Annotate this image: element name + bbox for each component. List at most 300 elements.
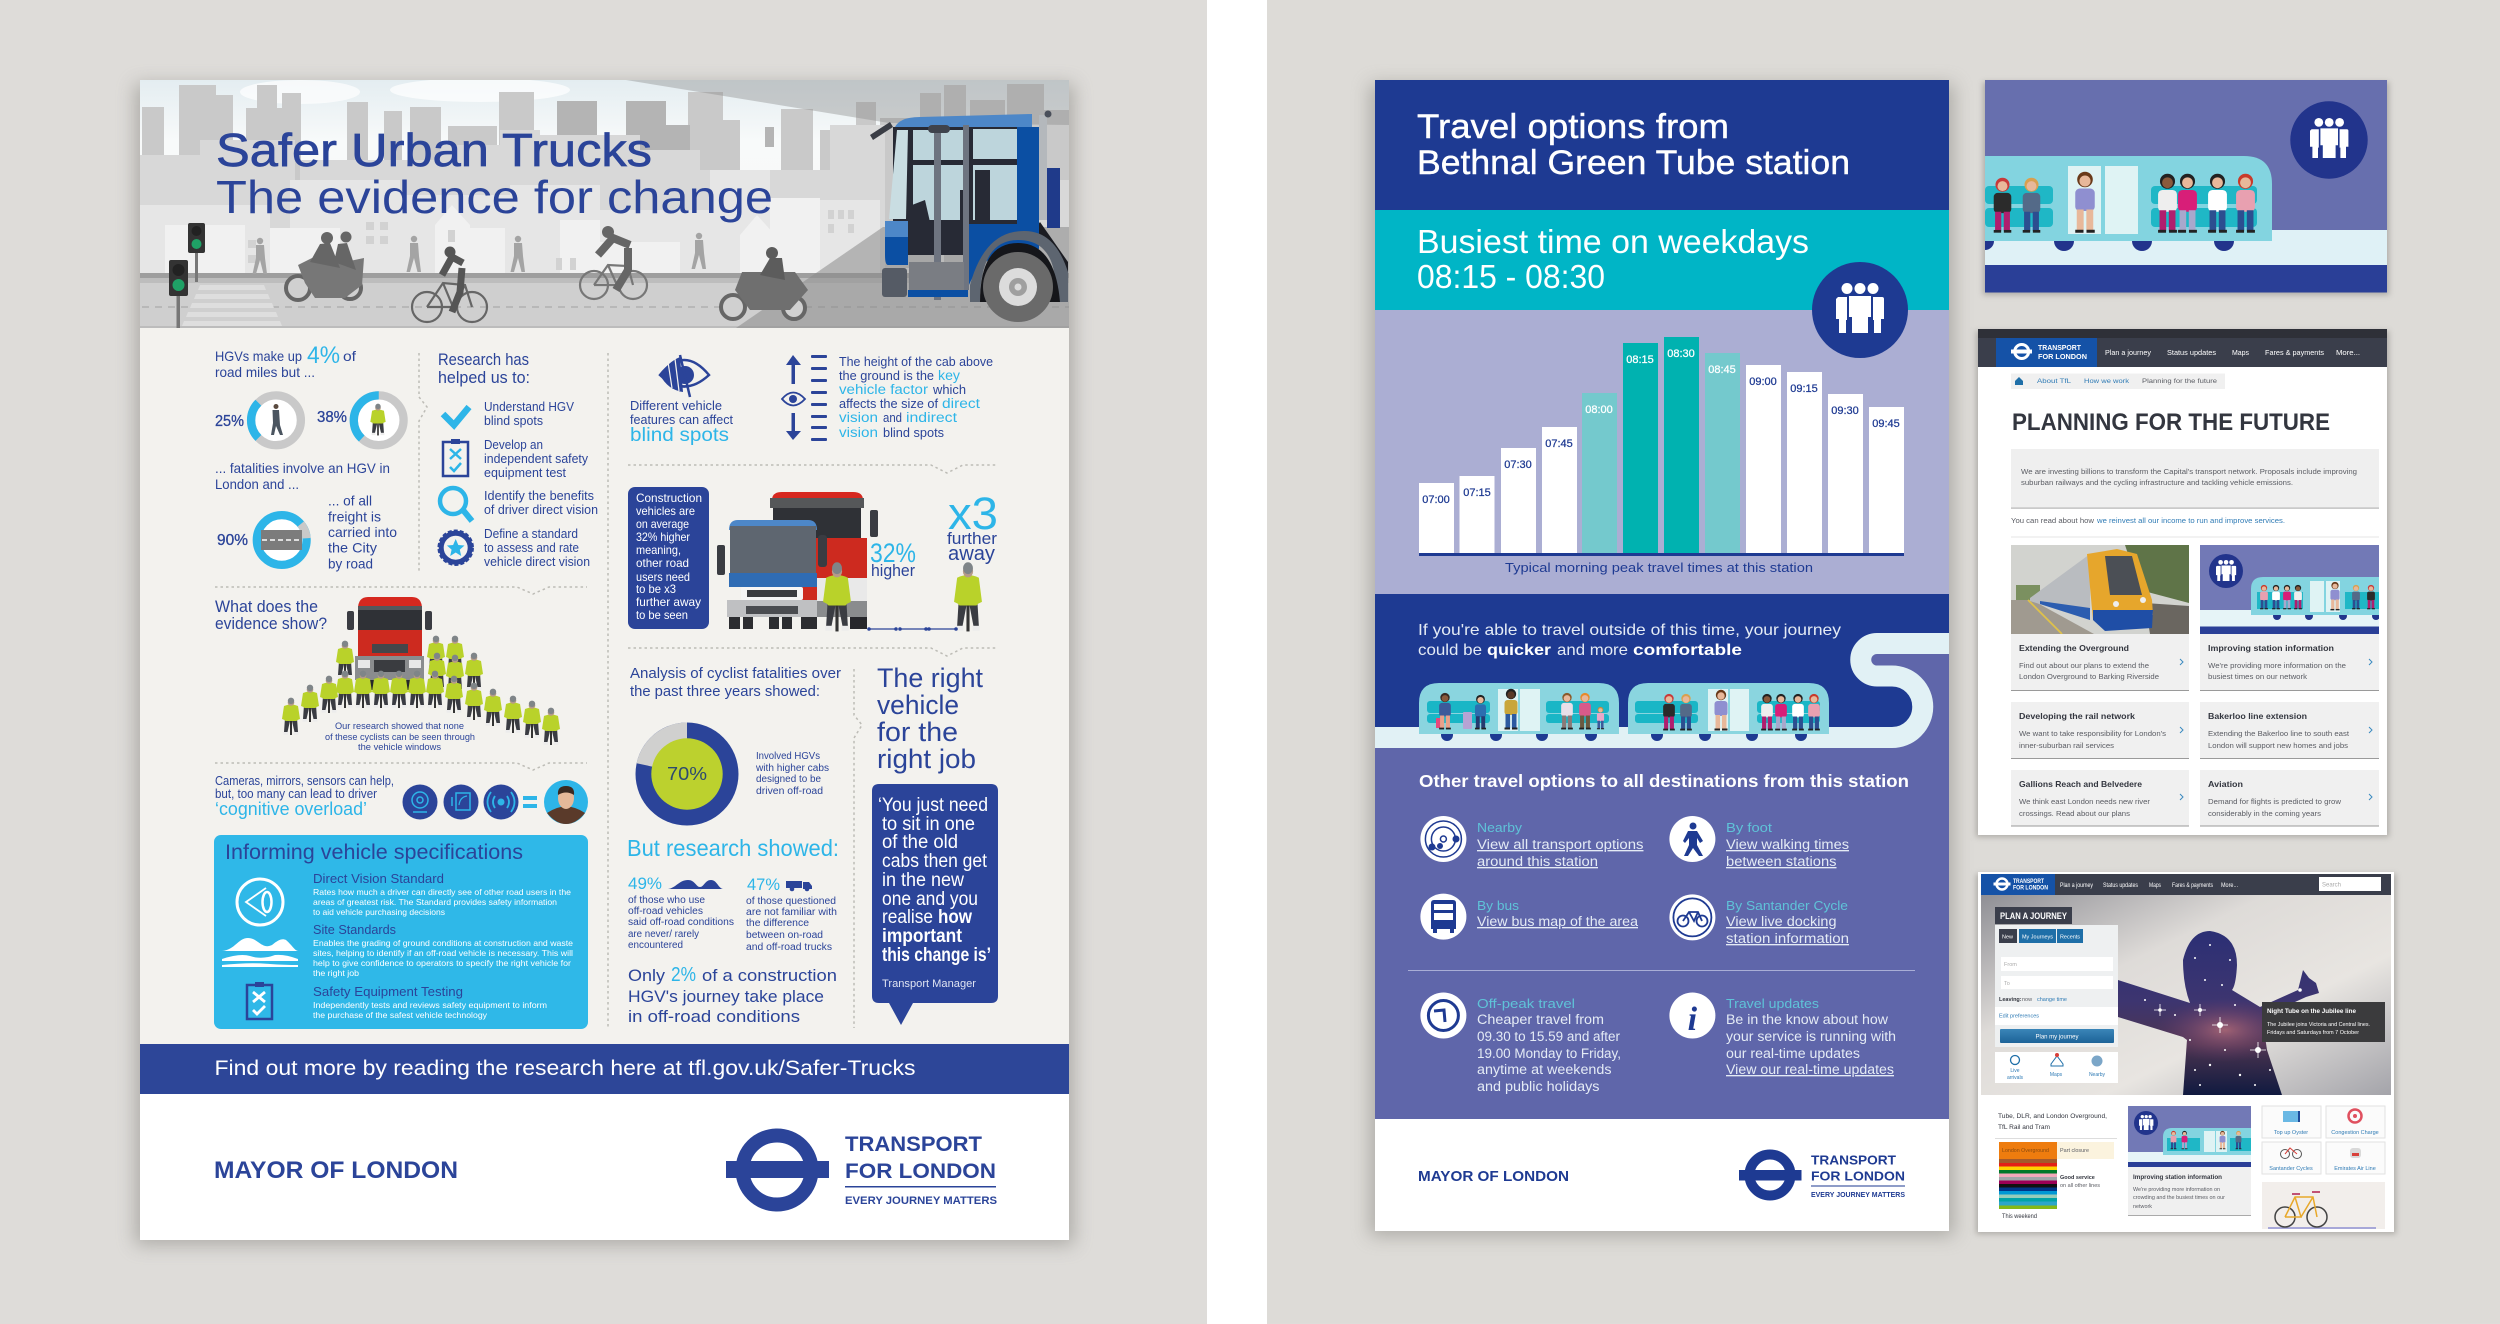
train carriage one	[1419, 683, 1619, 741]
navigation bar: FOR LONDON	[2013, 886, 2048, 892]
stat block: HGV road miles: of	[343, 348, 356, 364]
bar labels: 07:45	[1545, 438, 1573, 450]
cyclist two	[580, 226, 647, 299]
option: santander cycle: station information	[1726, 931, 1849, 946]
option: off-peak travel: and public holidays	[1477, 1079, 1600, 1094]
title band: Travel options from	[1417, 108, 1729, 146]
navigation bar: Maps	[2149, 883, 2161, 889]
cyclist fatalities analysis: Involved HGVs	[756, 751, 820, 762]
off-peak message: and more	[1557, 642, 1628, 659]
research list: blind spots	[484, 414, 543, 428]
cyclist one	[412, 246, 487, 322]
option: nearby: View all transport options	[1477, 837, 1644, 852]
option: santander cycle: By Santander Cycle	[1726, 898, 1848, 913]
bar labels: 09:45	[1872, 418, 1900, 430]
night tube caption: Night Tube on the Jubilee line	[2267, 1008, 2356, 1015]
stat block: HGV road miles: by road	[328, 556, 373, 572]
navigation bar: TRANSPORT	[2038, 343, 2081, 352]
panel: informing vehicle specifications: Safety Equipment Testing	[313, 984, 463, 999]
link cards: London Overground to Barking Riverside	[2019, 674, 2159, 681]
option: off-peak travel	[1420, 992, 1621, 1094]
panel: informing vehicle specifications: Rates how much a driver can directly see of other road users in the	[313, 887, 571, 897]
link cards: Gallions Reach and Belvedere	[2019, 779, 2142, 789]
cyclist fatalities analysis: But research showed:	[627, 835, 839, 861]
mayor of london wordmark: MAYOR OF LONDON	[214, 1157, 458, 1184]
website screenshot: planning for the future	[1978, 329, 2387, 835]
off-peak message: quicker	[1487, 642, 1551, 659]
label: x3 further away	[947, 488, 998, 565]
journey planner panel: Leaving:	[1999, 997, 2022, 1003]
option: off-peak travel: Off-peak travel	[1477, 996, 1575, 1011]
busiest time band: Busiest time on weekdays	[1417, 223, 1809, 260]
night tube caption	[2262, 1002, 2385, 1042]
donut 25 percent	[215, 385, 311, 456]
icon: direct vision	[237, 879, 283, 925]
stat block: HGV road miles: ... of all	[328, 493, 372, 509]
link cards: inner-suburban rail services	[2019, 743, 2115, 750]
navigation bar: Plan a journey	[2105, 348, 2151, 357]
off-peak message	[1418, 622, 1841, 659]
transport for london wordmark: FOR LONDON	[845, 1160, 996, 1183]
cyclist fatalities analysis: designed to be	[756, 774, 821, 785]
section divider	[1408, 970, 1915, 971]
link cards: Aviation	[2208, 779, 2243, 789]
cyclist fatalities analysis: the past three years showed:	[630, 684, 820, 700]
navigation bar: More...	[2336, 348, 2360, 357]
icon: clipboard	[443, 439, 468, 476]
purple section background	[1375, 594, 1949, 1119]
label: 32 percent higher	[870, 538, 916, 580]
busiest time band: 08:15 - 08:30	[1417, 258, 1605, 295]
option: off-peak travel: 09.30 to 15.59 and after	[1477, 1029, 1620, 1044]
right vehicle heading: The right	[877, 663, 983, 693]
callout: construction vehicles: vehicles are	[636, 504, 695, 518]
cab height block: vision	[839, 425, 878, 440]
transport for london wordmark	[1811, 1152, 1905, 1199]
galaxy silhouette	[2110, 925, 2325, 1095]
website screenshot: TfL homepage	[1978, 872, 2394, 1232]
evidence section	[215, 597, 560, 753]
research list: of driver direct vision	[484, 503, 598, 517]
panel: informing vehicle specifications: to aid vehicle purchasing decisions	[313, 907, 445, 917]
blue section above track	[1375, 594, 1949, 738]
transport for london wordmark: EVERY JOURNEY MATTERS	[845, 1195, 997, 1207]
icon: mirror	[444, 784, 478, 820]
roundel logo	[726, 1136, 829, 1204]
navigation bar: Search	[2322, 882, 2341, 888]
icon: height scale and eye	[782, 355, 827, 441]
callout: construction vehicles: 32% higher	[636, 530, 690, 544]
page heading: PLANNING FOR THE FUTURE	[2012, 409, 2330, 436]
icon: magnifier	[440, 488, 472, 521]
link cards: Extending the Bakerloo line to south east	[2208, 731, 2349, 738]
cyclist fatalities analysis: driven off-road	[756, 786, 823, 797]
banner card: station information	[1976, 80, 2387, 292]
title band	[1375, 80, 1949, 210]
cab height block: affects the size of	[839, 397, 939, 411]
cab height block: and	[883, 411, 902, 425]
title	[216, 124, 773, 223]
research list: Define a standard	[484, 527, 578, 541]
research list: vehicle direct vision	[484, 555, 590, 569]
panel: informing vehicle specifications: help to give confidence to operators to specify the right vehicle for	[313, 958, 571, 968]
link cards: Demand for flights is predicted to grow	[2208, 799, 2342, 806]
cyclist fatalities analysis: with higher cabs	[755, 763, 829, 774]
research list: equipment test	[484, 466, 567, 480]
breadcrumb	[2011, 374, 2225, 389]
poster: Bethnal Green travel options	[1375, 80, 1949, 1231]
bar labels	[1422, 348, 1900, 506]
tube status list: This weekend	[2002, 1214, 2037, 1220]
callout: quote: Transport Manager	[882, 978, 976, 990]
cab height block: vision	[839, 410, 878, 425]
label: x3 further away: x3	[948, 488, 998, 539]
blind spots block: blind spots	[630, 425, 729, 446]
station information card	[2128, 1106, 2251, 1216]
truck view shading	[626, 80, 1069, 328]
callout: construction vehicles	[628, 487, 709, 629]
option: off-peak travel: Cheaper travel from	[1477, 1012, 1604, 1027]
cab height block: The height of the cab above	[839, 355, 993, 369]
breadcrumb: Planning for the future	[2142, 378, 2217, 385]
journey planner panel: PLAN A JOURNEY	[2000, 911, 2067, 921]
header illustration: city street	[140, 78, 1069, 328]
pedestrians silhouettes	[252, 233, 706, 274]
callout: construction vehicles: on average	[636, 517, 689, 531]
panel: informing vehicle specifications	[214, 835, 588, 1029]
option: by bus: By bus	[1477, 898, 1520, 913]
tube status list: Part closure	[2060, 1148, 2089, 1154]
link cards: Improving station information	[2208, 643, 2334, 653]
footer right poster	[1375, 1119, 1949, 1231]
stat: 49 percent: said off-road conditions	[628, 917, 734, 928]
stat: 47 percent: and off-road trucks	[746, 942, 832, 953]
panel: informing vehicle specifications: Direct Vision Standard	[313, 871, 444, 886]
option: by foot: between stations	[1726, 854, 1837, 869]
option: travel updates: Travel updates	[1726, 996, 1820, 1011]
panel: informing vehicle specifications: areas of greatest risk. The Standard provides safety information	[313, 897, 557, 907]
mayor of london wordmark: MAYOR OF LONDON	[1418, 1168, 1569, 1185]
navigation bar: Status updates	[2103, 883, 2138, 889]
stat: 49 percent: off-road vehicles	[628, 906, 703, 917]
footer left poster	[140, 1094, 1069, 1240]
caption: Our research showed that none	[335, 721, 464, 732]
journey planner panel: arrivals	[2007, 1075, 2024, 1081]
transport for london wordmark: TRANSPORT	[1811, 1152, 1896, 1168]
intro box: we reinvest all our income to run and improve services.	[2096, 518, 2285, 525]
quick link tiles: Top up Oyster	[2274, 1130, 2308, 1136]
label: 32 percent higher: higher	[871, 561, 915, 580]
evidence section: What does the	[215, 598, 318, 616]
photo: overground train	[2011, 545, 2189, 634]
option: by foot: By foot	[1726, 820, 1772, 835]
off-peak message: could be	[1418, 642, 1482, 659]
stat: 47 percent: of those questioned	[746, 896, 836, 907]
navigation bar: TRANSPORT	[2013, 879, 2044, 885]
icon: sensor	[484, 784, 518, 820]
background left	[0, 0, 1207, 1324]
caption: the vehicle windows	[358, 742, 441, 753]
dotted dividers	[215, 353, 998, 1028]
journey planner panel	[1995, 907, 2118, 1083]
crowd icon badge	[2290, 101, 2368, 179]
stat: 2 percent: Only	[628, 967, 666, 985]
icon: clipboard white	[247, 982, 272, 1019]
link cards: considerably in the coming years	[2208, 811, 2322, 818]
option: travel updates: your service is running with	[1726, 1029, 1896, 1044]
cab height block: blind spots	[883, 426, 944, 440]
option: travel updates	[1669, 992, 1896, 1077]
callout: quote: to sit in one	[882, 814, 975, 835]
journey planner panel: Nearby	[2089, 1072, 2106, 1078]
callout: construction vehicles: Construction	[636, 491, 702, 505]
navigation bar: Fares & payments	[2172, 883, 2213, 889]
bar chart panel	[1375, 310, 1949, 594]
bar labels: 08:00	[1585, 404, 1613, 416]
donut chart 70 percent: 70%	[667, 764, 707, 784]
stat: 2 percent: HGV's journey take place	[628, 988, 824, 1006]
navigation bar	[1978, 329, 2387, 367]
navigation bar	[1981, 874, 2391, 895]
link cards: Extending the Overground	[2019, 643, 2129, 653]
tube status list: Good service	[2060, 1175, 2095, 1181]
callout: quote: cabs then get	[882, 851, 988, 872]
option: off-peak travel: 19.00 Monday to Friday,	[1477, 1046, 1621, 1061]
station information card: Improving station information	[2133, 1174, 2222, 1181]
callout: construction vehicles: meaning,	[636, 543, 681, 557]
stat: 49 percent: 49%	[628, 874, 662, 893]
blind spots block	[630, 355, 734, 446]
callout: construction vehicles: to be seen	[636, 608, 688, 622]
stat block: HGV road miles: the City	[328, 540, 377, 556]
bars	[1419, 337, 1904, 556]
title band: Bethnal Green Tube station	[1417, 144, 1850, 182]
research list: Develop an	[484, 438, 543, 452]
cyclist near truck	[823, 562, 851, 631]
stat block: HGV road miles: HGVs make up	[215, 348, 302, 364]
evidence section: evidence show?	[215, 615, 327, 633]
icon: driver face	[544, 780, 588, 824]
quick link tiles: Congestion Charge	[2331, 1130, 2379, 1136]
panel: informing vehicle specifications: sites, helping to identify if an off-road vehicle is necessary. This will	[313, 948, 573, 958]
label: x3 further away: away	[948, 543, 995, 565]
chart caption: Typical morning peak travel times at this station	[1505, 560, 1813, 575]
link cards: We want to take responsibility for London's	[2019, 731, 2167, 738]
transport for london wordmark	[845, 1133, 997, 1207]
option: travel updates: View our real-time updates	[1726, 1062, 1894, 1077]
link cards: We're providing more information on the	[2208, 663, 2346, 670]
zebra crossing	[182, 285, 282, 326]
journey planner panel: Edit preferences	[1999, 1014, 2039, 1020]
stat block: HGV road miles: road miles but ...	[215, 364, 315, 380]
right vehicle heading: right job	[877, 744, 976, 774]
busiest time band	[1375, 210, 1949, 310]
stat block: HGV road miles: carried into	[328, 524, 397, 540]
panel: informing vehicle specifications: Informing vehicle specifications	[225, 841, 523, 864]
journey planner panel: From	[2004, 962, 2017, 968]
link cards: Developing the rail network	[2019, 711, 2135, 721]
stat: 47 percent: between on-road	[746, 930, 823, 941]
icon: site ground waves	[222, 938, 298, 967]
research list: Identify the benefits	[484, 489, 594, 503]
stat: 47 percent: the difference	[746, 918, 809, 929]
option: santander cycle	[1669, 894, 1849, 946]
journey planner panel: My Journeys	[2022, 934, 2053, 940]
cab height block: indirect	[906, 410, 957, 425]
poster: Safer Urban Trucks	[140, 78, 1069, 1240]
right vehicle heading: for the	[877, 717, 958, 747]
icon: camera	[402, 784, 438, 820]
transport for london wordmark: EVERY JOURNEY MATTERS	[1811, 1192, 1905, 1199]
red truck front	[347, 597, 432, 690]
stat: 47 percent: 47%	[747, 875, 780, 894]
bar labels: 09:15	[1790, 383, 1818, 395]
night tube caption: The Jubilee joins Victoria and Central lines.	[2267, 1022, 2370, 1028]
donut 90 percent: 90%	[217, 532, 248, 549]
donut 90 percent	[217, 505, 317, 575]
navigation bar: Fares & payments	[2265, 348, 2324, 357]
panel: informing vehicle specifications: the purchase of the safest vehicle technology	[313, 1010, 488, 1020]
stat block: HGV road miles: ... fatalities involve an HGV in	[215, 460, 390, 476]
donut 25 percent: 25%	[215, 413, 244, 430]
bar labels: 09:30	[1831, 405, 1859, 417]
cab height block: key	[938, 368, 960, 383]
callout: quote: realise	[882, 907, 933, 928]
right vehicle heading: vehicle	[877, 690, 959, 720]
cyclist fatalities analysis: Analysis of cyclist fatalities over	[630, 666, 841, 682]
link cards	[2011, 634, 2379, 826]
poster content background	[140, 80, 1069, 1240]
bar labels: 08:45	[1708, 364, 1736, 376]
quick link tiles	[2262, 1106, 2385, 1174]
callout: construction vehicles: to be x3	[636, 582, 676, 596]
train carriage two	[1628, 683, 1829, 741]
donut 38 percent	[317, 385, 414, 455]
quick link tiles: Santander Cycles	[2269, 1166, 2313, 1172]
navigation bar: Plan a journey	[2060, 883, 2093, 889]
breadcrumb: How we work	[2084, 378, 2130, 385]
off-peak message: comfortable	[1633, 642, 1742, 659]
option: travel updates: Be in the know about how	[1726, 1012, 1888, 1027]
cognitive overload: ‘cognitive overload’	[215, 799, 367, 819]
distance markers	[868, 628, 957, 630]
night tube caption: Fridays and Saturdays from 7 October	[2267, 1030, 2359, 1036]
label: 32 percent higher: 32%	[870, 538, 916, 568]
cognitive overload: Cameras, mirrors, sensors can help,	[215, 774, 394, 788]
travel options heading: Other travel options to all destinations from this station	[1419, 771, 1909, 791]
call to action band	[140, 1044, 1069, 1094]
cognitive overload: but, too many can lead to driver	[215, 787, 377, 801]
motorbike two	[721, 247, 808, 319]
callout: construction vehicles: users need	[636, 570, 690, 584]
tube status list: TfL Rail and Tram	[1998, 1124, 2050, 1131]
panel: informing vehicle specifications: Enables the grading of ground conditions at construction and waste	[313, 938, 573, 948]
stat block: HGV road miles: 4%	[307, 342, 340, 369]
bar labels: 07:30	[1504, 459, 1532, 471]
bar labels: 08:30	[1667, 348, 1695, 360]
option: travel updates: our real-time updates	[1726, 1046, 1860, 1061]
caption: of these cyclists can be seen through	[325, 732, 475, 743]
traffic lights	[169, 223, 205, 328]
icon: crossed eye	[660, 355, 709, 397]
tube status list	[1995, 1113, 2117, 1220]
cab height block: direct	[942, 396, 980, 411]
navigation bar: More...	[2221, 883, 2238, 889]
option: nearby: around this station	[1477, 854, 1598, 869]
link cards: Find out about our plans to extend the	[2019, 663, 2149, 670]
stat block: HGV road miles	[215, 342, 414, 575]
station information card: crowding and the busiest times on our	[2133, 1195, 2225, 1201]
research list: to assess and rate	[484, 541, 579, 555]
callout: quote: in the new	[882, 870, 964, 891]
group of cyclists around truck	[282, 636, 560, 745]
roundel logo	[1739, 1154, 1802, 1196]
icon: check mark	[443, 407, 469, 425]
stat: 47 percent	[746, 875, 837, 953]
stat: 49 percent: encountered	[628, 940, 683, 951]
callout: quote	[872, 784, 998, 1025]
intro box	[2011, 449, 2379, 538]
motorcycle with two riders	[286, 232, 364, 300]
cyclist further away	[954, 562, 982, 631]
bicycle tile	[2262, 1182, 2385, 1229]
callout: quote: how	[938, 907, 972, 928]
stat: 47 percent: are not familiar with	[746, 907, 837, 918]
stat: 49 percent: are never/ rarely	[628, 929, 699, 940]
quick link tiles: Emirates Air Line	[2334, 1166, 2376, 1172]
white gutter between the two panels	[1207, 0, 1267, 1324]
S-shaped track	[1375, 644, 1949, 738]
illustration: station information thumbnail	[2200, 545, 2380, 634]
navigation bar: FOR LONDON	[2038, 352, 2087, 361]
blind spots block: Different vehicle	[630, 399, 722, 413]
station information card: We're providing more information on	[2133, 1187, 2220, 1193]
cyclist fatalities analysis	[627, 666, 841, 1026]
callout: construction vehicles: further away	[636, 595, 701, 609]
cab height block: vehicle factor	[839, 382, 929, 397]
link cards: Bakerloo line extension	[2208, 711, 2307, 721]
option: by bus	[1420, 894, 1639, 940]
truck cab	[870, 110, 1068, 322]
journey planner panel: Maps	[2050, 1072, 2063, 1078]
navigation bar: Maps	[2232, 348, 2249, 357]
callout: quote: of the old	[882, 832, 958, 853]
tube status list: Tube, DLR, and London Overground,	[1998, 1113, 2107, 1120]
callout: quote: one and you	[882, 889, 978, 910]
train illustration	[1976, 156, 2272, 251]
cognitive overload	[215, 774, 588, 824]
stat: 2 percent: in off-road conditions	[628, 1008, 800, 1026]
donut chart 70 percent	[636, 722, 738, 826]
call to action band: Find out more by reading the research here at tfl.gov.uk/Safer-Trucks	[214, 1057, 916, 1080]
illustration: red truck behind blue truck	[717, 488, 998, 631]
option: santander cycle: View live docking	[1726, 914, 1836, 929]
journey planner panel: New	[2002, 934, 2013, 940]
cab height block: the ground is the	[839, 369, 934, 383]
panel: informing vehicle specifications: Site Standards	[313, 922, 396, 937]
option: nearby	[1420, 816, 1644, 869]
off-peak message: If you're able to travel outside of this time, your journey	[1418, 622, 1841, 639]
option: by foot	[1669, 816, 1849, 869]
navigation bar: Status updates	[2167, 348, 2216, 357]
stat: 2 percent: 2%	[671, 964, 696, 986]
link cards: busiest times on our network	[2208, 674, 2308, 681]
bar labels: 07:15	[1463, 487, 1491, 499]
bar labels: 08:15	[1626, 354, 1654, 366]
intro box: We are investing billions to transform the Capital's transport network. Proposals include improving	[2021, 469, 2357, 476]
title: The evidence for change	[216, 171, 773, 223]
station information card: network	[2133, 1204, 2152, 1210]
